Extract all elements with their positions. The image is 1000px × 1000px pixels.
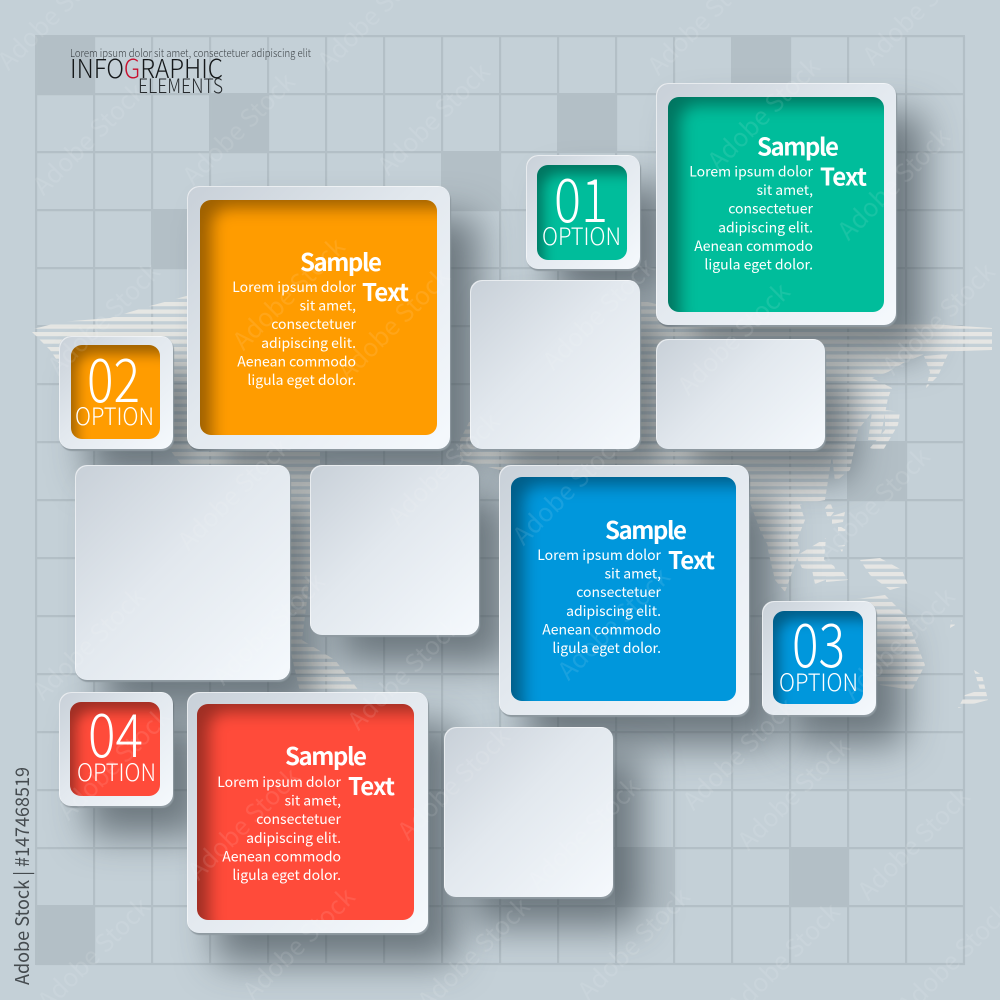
teal text area: Lorem ipsum dolor <box>689 162 814 182</box>
blue text area: ligula eget dolor. <box>552 638 661 658</box>
watermark overlay: Adobe Stock <box>389 719 517 847</box>
red text area: Lorem ipsum dolor <box>217 772 342 792</box>
watermark overlay: Adobe Stock <box>829 119 957 247</box>
orange text area: Sample <box>300 243 382 278</box>
watermark overlay: Adobe Stock <box>834 579 962 707</box>
watermark overlay: Adobe Stock <box>729 729 857 857</box>
orange text area: adipiscing elit. <box>261 333 356 353</box>
badge 02 face <box>71 345 160 439</box>
orange text area: consectetuer <box>271 314 357 334</box>
badge 02 face: 02 <box>87 333 140 420</box>
blue text area: sit amet, <box>604 564 661 584</box>
blank tile <box>444 727 613 897</box>
title block: ELEMENTS <box>138 70 223 99</box>
teal text area: sit amet, <box>756 180 813 200</box>
watermark overlay: Adobe Stock <box>24 579 152 707</box>
red text area: Aenean commodo <box>222 846 341 866</box>
watermark overlay: Adobe Stock <box>504 424 632 552</box>
watermark overlay: Adobe Stock <box>874 254 1000 382</box>
watermark overlay: Adobe Stock <box>699 49 827 177</box>
watermark overlay: Adobe Stock <box>49 699 177 827</box>
red text area: adipiscing elit. <box>246 828 341 848</box>
watermark overlay: Adobe Stock <box>669 274 797 402</box>
badge 03 face: 03 <box>792 598 845 685</box>
panel: blue sample text <box>499 465 749 715</box>
badge 01 face <box>537 165 627 260</box>
watermark overlay: Adobe Stock <box>519 769 647 897</box>
orange text area: sit amet, <box>299 296 356 316</box>
orange text area: Aenean commodo <box>237 351 356 371</box>
option badge 01 <box>526 155 640 269</box>
blank tile <box>310 465 479 635</box>
watermark overlay: Adobe Stock <box>174 64 302 192</box>
teal text area <box>668 97 884 312</box>
orange text area: Text <box>362 273 409 308</box>
red text area <box>197 704 414 920</box>
badge 04 face: 04 <box>88 688 143 775</box>
watermark overlay: Adobe Stock <box>369 54 497 182</box>
watermark overlay: Adobe Stock <box>39 254 167 382</box>
watermark overlay: Adobe Stock <box>849 779 977 907</box>
watermark overlay: Adobe Stock <box>204 564 332 692</box>
panel: teal sample text <box>656 83 896 325</box>
panel: red sample text <box>187 692 428 933</box>
red text area: sit amet, <box>284 791 341 811</box>
watermark overlay: Adobe Stock <box>809 439 937 567</box>
teal text area: ligula eget dolor. <box>704 254 813 274</box>
title block <box>70 45 311 99</box>
watermark overlay: Adobe Stock <box>674 689 802 817</box>
red text area: Sample <box>285 737 367 772</box>
blue text area: Sample <box>605 511 687 546</box>
blank tile <box>470 280 640 449</box>
blue text area: adipiscing elit. <box>566 601 661 621</box>
teal text area: consectetuer <box>728 199 814 219</box>
red text area: consectetuer <box>256 809 342 829</box>
orange text area: ligula eget dolor. <box>247 370 356 390</box>
blank tile <box>656 339 825 449</box>
blue text area <box>511 477 736 701</box>
teal text area: Text <box>820 158 867 192</box>
world map <box>30 295 992 708</box>
watermark overlay: Adobe Stock <box>534 249 662 377</box>
watermark overlay: Adobe Stock <box>339 609 467 737</box>
orange text area: Lorem ipsum dolor <box>232 277 357 297</box>
badge 01 face: 01 <box>554 153 608 240</box>
title block: INFOGRAPHIC <box>70 49 223 86</box>
watermark overlay: Adobe Stock <box>179 759 307 887</box>
watermark overlay: Adobe Stock <box>549 559 677 687</box>
watermark overlay: Adobe Stock <box>224 229 352 357</box>
blue text area: Text <box>668 541 715 576</box>
red text area: ligula eget dolor. <box>232 865 341 885</box>
watermark overlay: Adobe Stock <box>379 404 507 532</box>
panel: orange sample text <box>187 186 450 449</box>
badge 01 face: OPTION <box>542 217 621 252</box>
watermark overlay: Adobe Stock <box>24 74 152 202</box>
orange text area <box>200 200 437 435</box>
blue text area: Aenean commodo <box>542 619 661 639</box>
badge 03 face <box>773 611 863 704</box>
red text area: Text <box>348 767 395 802</box>
watermark overlay: Adobe Stock <box>329 259 457 387</box>
badge 03 face: OPTION <box>779 663 858 698</box>
blue text area: Lorem ipsum dolor <box>537 545 662 565</box>
badge 04 face <box>70 702 160 796</box>
teal text area: Aenean commodo <box>694 236 813 256</box>
option badge 03 <box>762 601 876 715</box>
watermark overlay: Adobe Stock <box>169 429 297 557</box>
badge 02 face: OPTION <box>75 397 154 432</box>
teal text area: Sample <box>757 128 839 162</box>
option badge 04 <box>59 692 173 806</box>
blank tile <box>75 465 290 680</box>
blue text area: consectetuer <box>576 582 662 602</box>
badge 04 face: OPTION <box>77 753 156 788</box>
option badge 02 <box>59 336 173 449</box>
teal text area: adipiscing elit. <box>718 217 813 237</box>
